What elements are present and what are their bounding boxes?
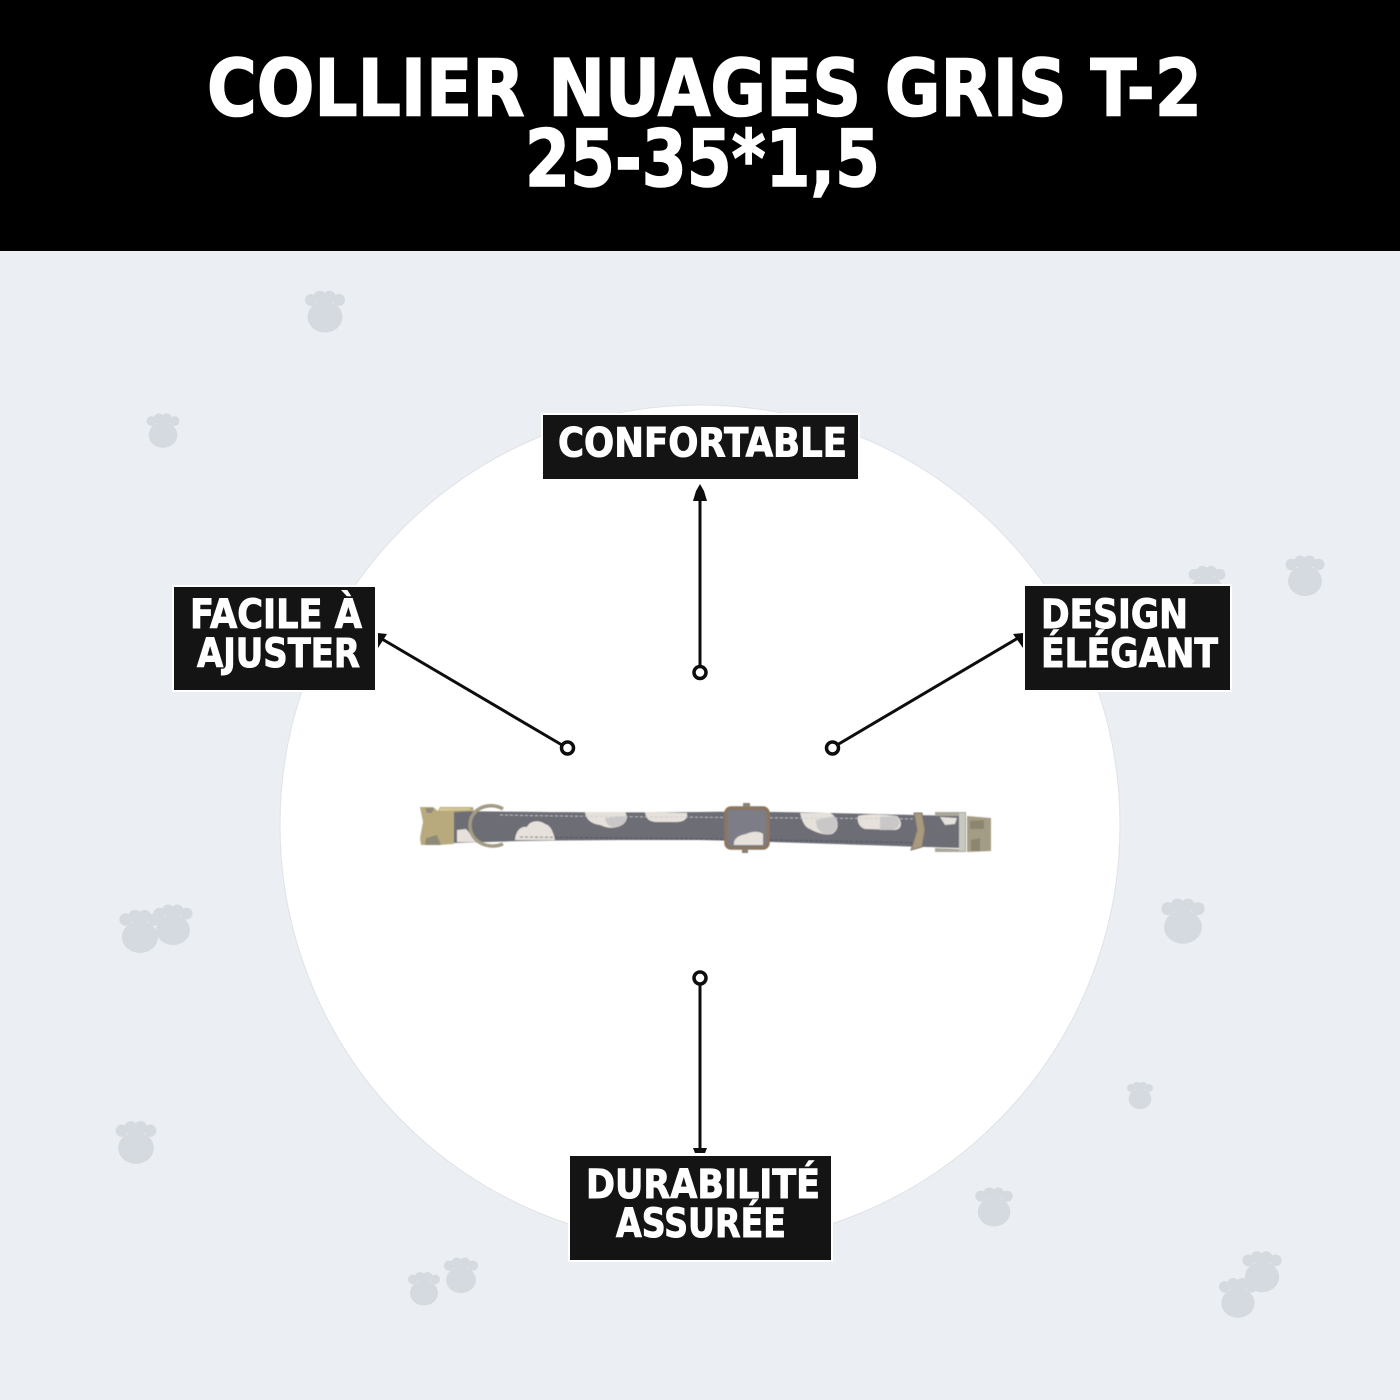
D ring: [470, 806, 503, 846]
left buckle: [420, 807, 474, 845]
background paw prints: [116, 291, 1324, 1318]
label: durabilite assuree: DURABILITÉ: [586, 1160, 820, 1208]
slider buckle: [726, 803, 768, 853]
arrow: up-right to design elegant: [826, 633, 1023, 754]
right buckle: [935, 812, 991, 852]
stitching: [500, 815, 925, 819]
label: durabilite assuree: [569, 1155, 832, 1261]
arrow: up to confortable: [693, 484, 707, 678]
label: durabilite assuree: ASSURÉE: [616, 1199, 786, 1247]
header band: [0, 0, 1400, 251]
collar product image: [420, 803, 991, 853]
collar strap: [454, 811, 962, 848]
arrow: down to durabilite: [693, 972, 707, 1153]
label: facile a ajuster: FACILE À: [190, 590, 362, 638]
label: confortable: [542, 414, 859, 480]
white central circle: [280, 405, 1120, 1245]
cloud pattern: [457, 812, 957, 842]
cloud shading: [605, 816, 899, 834]
label: confortable: CONFORTABLE: [558, 420, 847, 466]
label: design elegant: ÉLÉGANT: [1041, 629, 1219, 677]
arrow: up-left to facile a ajuster: [378, 633, 574, 754]
label: design elegant: DESIGN: [1041, 592, 1188, 638]
label: design elegant: [1024, 585, 1231, 691]
right keeper ring: [911, 813, 925, 850]
title line 1: COLLIER NUAGES GRIS T-2: [207, 44, 1202, 134]
label: facile a ajuster: AJUSTER: [197, 631, 360, 677]
label: facile a ajuster: [173, 586, 376, 691]
title line 2: 25-35*1,5: [525, 115, 880, 205]
